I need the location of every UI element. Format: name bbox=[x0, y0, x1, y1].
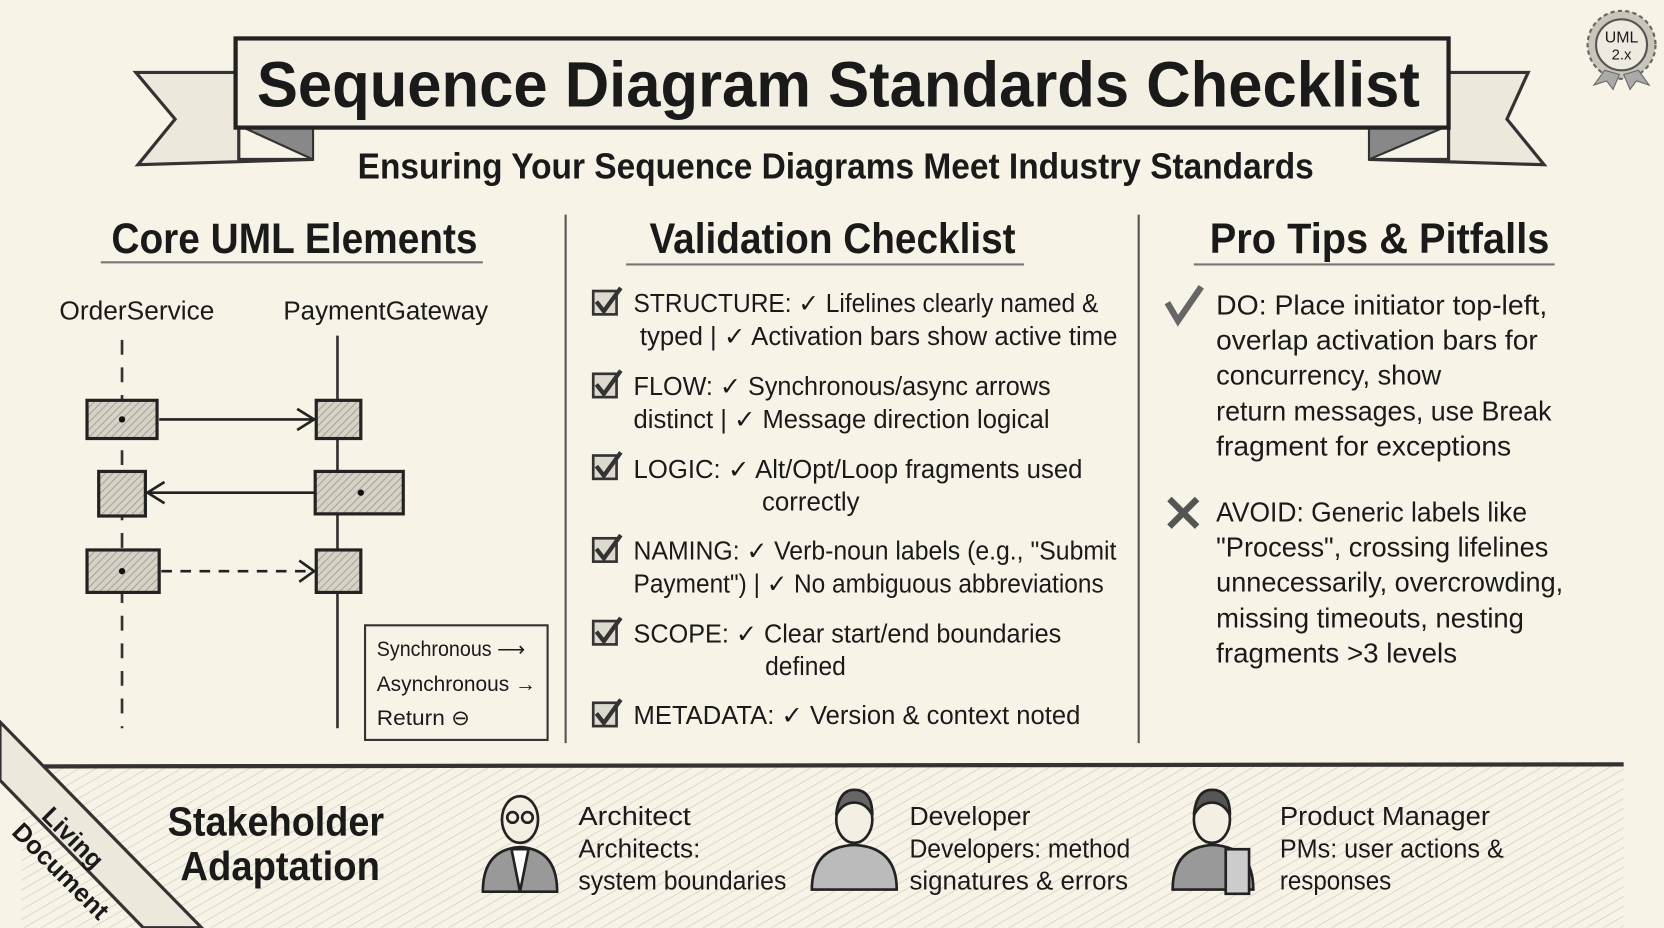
checklist bbox=[593, 288, 1117, 730]
checklist: STRUCTURE: ✓ Lifelines clearly named & bbox=[634, 290, 1098, 318]
bottom band: stakeholder adaptation: Stakeholder bbox=[168, 798, 384, 844]
pro tips: "Process", crossing lifelines bbox=[1216, 531, 1548, 562]
pro tips: DO: Place initiator top-left, bbox=[1216, 289, 1547, 320]
bottom band: stakeholder adaptation: Architects: bbox=[578, 836, 700, 864]
dividers bbox=[565, 215, 567, 743]
pro tips: overlap activation bars for bbox=[1216, 324, 1538, 355]
bottom band: stakeholder adaptation: Adaptation bbox=[180, 843, 380, 889]
checklist: defined bbox=[765, 653, 846, 681]
checklist: FLOW: ✓ Synchronous/async arrows bbox=[634, 373, 1051, 401]
pro tips: missing timeouts, nesting bbox=[1216, 602, 1524, 633]
legend bbox=[365, 625, 548, 740]
pro tips: concurrency, show bbox=[1216, 359, 1441, 390]
legend: Asynchronous → bbox=[377, 673, 536, 696]
pro tips: fragments >3 levels bbox=[1216, 637, 1457, 668]
checklist: distinct | ✓ Message direction logical bbox=[634, 406, 1050, 434]
bottom band: stakeholder adaptation: Developers: method bbox=[909, 836, 1130, 864]
checklist: Payment") | ✓ No ambiguous abbreviations bbox=[634, 570, 1104, 598]
pro tips: fragment for exceptions bbox=[1216, 431, 1511, 462]
checklist: METADATA: ✓ Version & context noted bbox=[634, 702, 1080, 730]
pro tips: AVOID: Generic labels like bbox=[1216, 496, 1527, 527]
checklist: typed | ✓ Activation bars show active time bbox=[640, 323, 1117, 351]
corner ribbon: Living Document bbox=[0, 722, 202, 928]
sequence diagram: PaymentGateway bbox=[283, 298, 488, 326]
pro tips: return messages, use Break bbox=[1216, 395, 1552, 426]
bottom band: stakeholder adaptation: Product Manager bbox=[1280, 803, 1491, 831]
bottom band: stakeholder adaptation: responses bbox=[1280, 868, 1391, 896]
icon: product manager bbox=[1173, 790, 1253, 894]
bottom band: stakeholder adaptation: signatures & errors bbox=[909, 868, 1128, 896]
pro tips: unnecessarily, overcrowding, bbox=[1216, 566, 1563, 597]
checklist: NAMING: ✓ Verb-noun labels (e.g., "Submit bbox=[634, 538, 1116, 566]
legend: Return ⊖ bbox=[377, 707, 470, 730]
checklist: correctly bbox=[762, 489, 860, 517]
subtitle: Ensuring Your Sequence Diagrams Meet Industry Standards bbox=[358, 146, 1314, 187]
checklist: LOGIC: ✓ Alt/Opt/Loop fragments used bbox=[634, 456, 1082, 484]
bottom band: stakeholder adaptation: Architect bbox=[578, 803, 691, 831]
badge: UML 2.x: 2.x bbox=[1612, 48, 1632, 64]
sequence diagram bbox=[59, 298, 488, 728]
sequence diagram: OrderService bbox=[59, 298, 214, 326]
heading: Core UML Elements: Core UML Elements bbox=[111, 215, 478, 262]
legend: Synchronous ⟶ bbox=[377, 638, 525, 661]
pro tips bbox=[1167, 287, 1563, 668]
bottom band: stakeholder adaptation: PMs: user actions & bbox=[1280, 836, 1504, 864]
corner ribbon: Living Document: Living bbox=[36, 802, 109, 875]
heading: Validation Checklist: Validation Checklist bbox=[649, 215, 1016, 262]
bottom band: stakeholder adaptation: system boundaries bbox=[578, 868, 786, 896]
bottom band: stakeholder adaptation bbox=[21, 764, 1624, 928]
heading: Pro Tips & Pitfalls: Pro Tips & Pitfalls bbox=[1210, 215, 1549, 262]
badge: UML 2.x: UML bbox=[1605, 30, 1638, 47]
bottom band: stakeholder adaptation: Developer bbox=[909, 803, 1031, 831]
checklist: SCOPE: ✓ Clear start/end boundaries bbox=[634, 620, 1061, 648]
corner ribbon: Living Document: Document bbox=[6, 818, 115, 926]
icon: architect bbox=[483, 796, 557, 892]
title banner bbox=[136, 38, 1544, 165]
title: Sequence Diagram Standards Checklist bbox=[257, 49, 1420, 120]
badge: UML 2.x bbox=[1588, 11, 1656, 89]
icon: developer bbox=[812, 790, 897, 890]
